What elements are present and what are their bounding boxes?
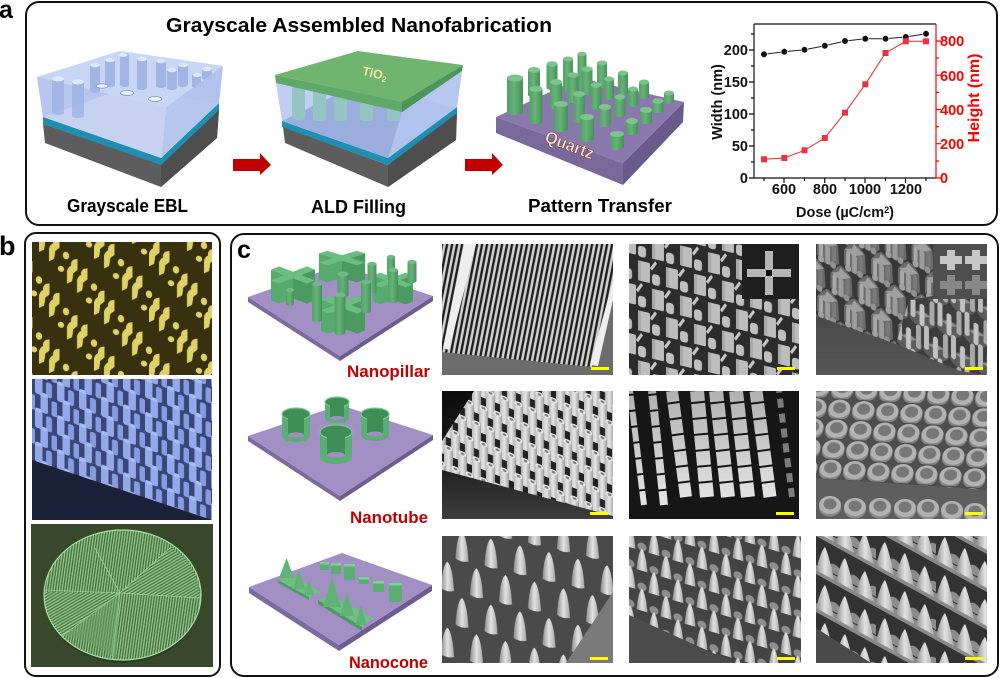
- left axis ticks: 100: [724, 107, 748, 123]
- axis title: Width: Width (nm): [710, 64, 726, 140]
- x axis ticks: 600: [772, 182, 796, 198]
- panel c: nanostructure library: [231, 234, 998, 676]
- diagram: nanocone: [249, 553, 432, 651]
- ridge and cones, large: [318, 577, 373, 631]
- left axis ticks: 0: [740, 171, 748, 187]
- right axis ticks: [940, 34, 964, 187]
- diagram: nanotube: [248, 397, 433, 501]
- width series: [761, 30, 929, 58]
- blocks: [320, 562, 402, 602]
- tubes: [282, 397, 389, 464]
- right axis ticks: 600: [940, 69, 964, 85]
- title: Grayscale Assembled Nanofabrication: [166, 15, 552, 37]
- arrow: step 2 to step 3: [465, 153, 503, 175]
- SEM: rectangular nanotube rows: [629, 391, 799, 519]
- step label: ALD Filling: ALD Filling: [311, 197, 406, 217]
- diagram: nanopillar: [248, 251, 433, 361]
- label: Nanocone: Nanocone: [349, 653, 428, 672]
- right axis ticks: 800: [940, 34, 964, 50]
- SEM: dense nanocones: [629, 536, 801, 663]
- arrow: step 1 to step 2: [233, 153, 271, 175]
- right axis ticks: 200: [940, 137, 964, 153]
- label: TiO2: 2: [381, 75, 388, 84]
- diagram: pattern transfer: [496, 52, 684, 185]
- left axis ticks: 200: [724, 43, 748, 59]
- green pillars: [507, 52, 674, 150]
- left axis ticks: [724, 43, 748, 187]
- SEM: nanotube pillars: [442, 391, 613, 519]
- right axis ticks: 400: [940, 103, 964, 119]
- SEM: nanocone ridges: [816, 536, 987, 663]
- filled TiO2 pillars: [292, 86, 400, 121]
- panel c label: c: [237, 236, 251, 264]
- x axis ticks: [772, 182, 922, 198]
- SEM: sparse nanocones: [442, 536, 613, 663]
- height series: [761, 38, 929, 162]
- axis title: Height: Height (nm): [966, 54, 983, 142]
- x axis ticks: 1200: [890, 182, 922, 198]
- SEM: lumps and spikes with inset: [816, 244, 987, 375]
- label: Nanopillar: Nanopillar: [347, 362, 430, 381]
- label: Quartz: Quartz: [542, 127, 597, 163]
- ridge and cones: [278, 558, 321, 600]
- label: TiO2: TiO: [361, 64, 384, 82]
- micrograph: yellow nanostructures: [32, 242, 212, 375]
- SEM: split ring nanotubes: [816, 391, 987, 519]
- diagram: ALD filling: [275, 51, 463, 187]
- x axis ticks: 1000: [849, 182, 881, 198]
- SEM: nanopillar array stripes: [442, 244, 613, 375]
- panel a: grayscale assembled nanofabrication: [26, 2, 997, 225]
- chart: width and height vs dose: [710, 24, 983, 221]
- x axis ticks: 800: [813, 182, 837, 198]
- axis title: Dose: Dose (µC/cm: [796, 205, 884, 221]
- SEM: cross array with inset: [629, 244, 799, 375]
- axes: [749, 24, 941, 183]
- left axis ticks: 50: [732, 139, 748, 155]
- micrograph: green metalens: [31, 524, 213, 667]
- step label: Grayscale EBL: Grayscale EBL: [67, 196, 188, 216]
- micrograph: blue nanopillars: [32, 379, 212, 520]
- label: Nanotube: Nanotube: [350, 508, 428, 527]
- step label: Pattern Transfer: Pattern Transfer: [528, 196, 672, 216]
- right axis ticks: 0: [940, 171, 948, 187]
- axis title: Dose: ): [889, 205, 894, 221]
- axis title: Dose: 2: [884, 205, 889, 215]
- diagram: grayscale EBL: [37, 51, 223, 187]
- left axis ticks: 150: [724, 75, 748, 91]
- panel b: false-colour micrographs: [25, 233, 220, 676]
